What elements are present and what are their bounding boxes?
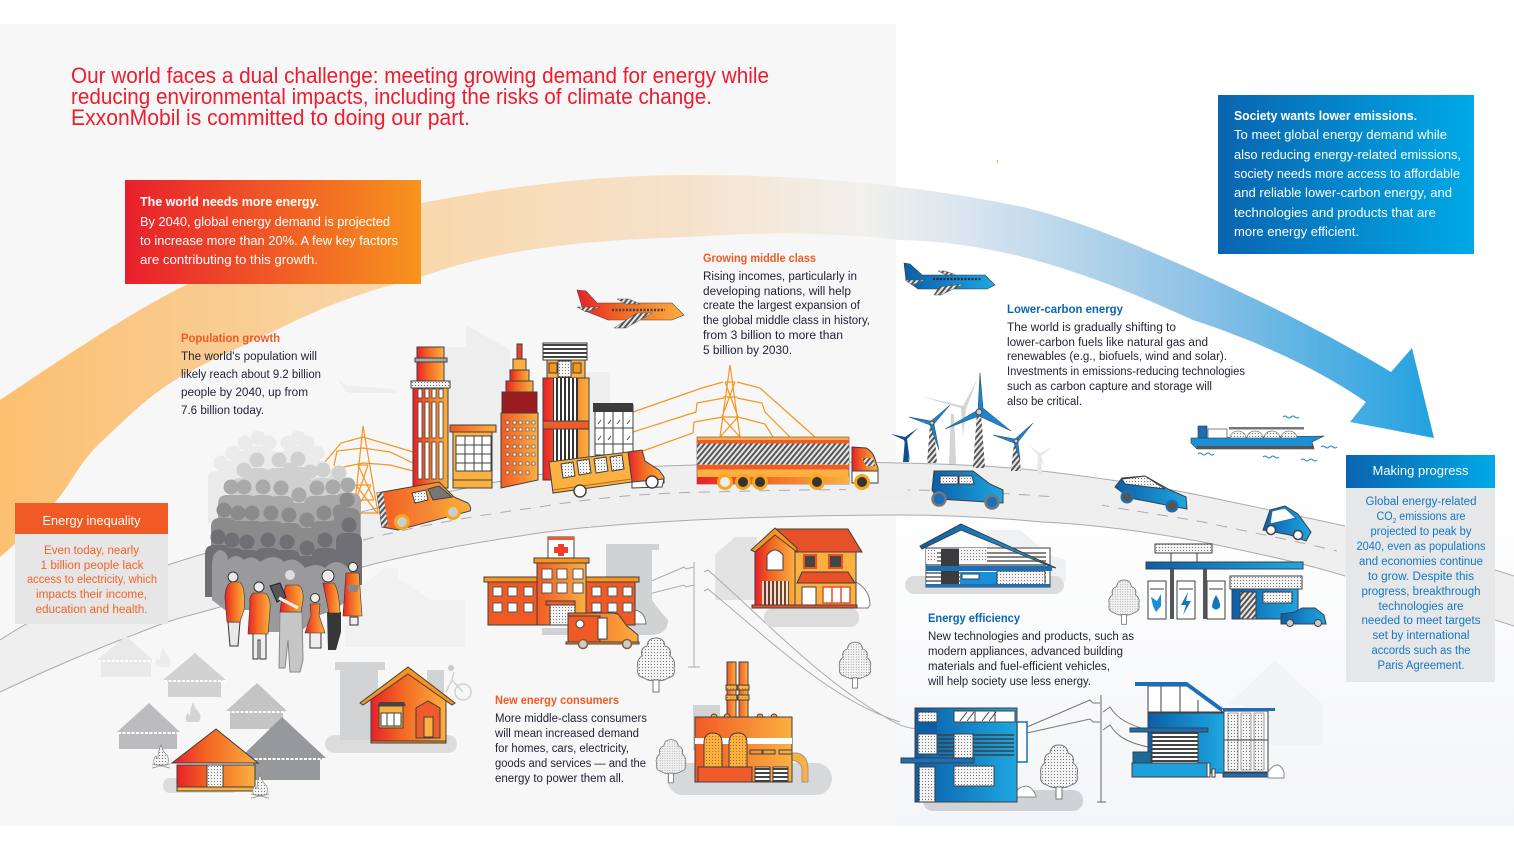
ambulance bbox=[566, 613, 639, 648]
blue building, lower right bbox=[1130, 682, 1284, 778]
callout: the world needs more energy: By 2040, global energy demand is projected bbox=[140, 214, 390, 229]
panel: making progress: technologies are bbox=[1378, 601, 1464, 613]
callout: the world needs more energy: The world needs more energy. bbox=[140, 194, 319, 209]
text: growing middle class: Rising incomes, particularly in bbox=[703, 271, 857, 283]
blue car bbox=[1115, 476, 1187, 512]
callout: society wants lower emissions bbox=[1218, 95, 1474, 254]
text: population growth: Population growth bbox=[181, 331, 280, 345]
building: stepped skyscraper bbox=[501, 344, 538, 488]
text: energy efficiency: will help society use less energy. bbox=[927, 676, 1091, 688]
huts bbox=[97, 636, 326, 798]
gas station bbox=[1146, 544, 1326, 626]
wind turbines bbox=[891, 373, 1053, 475]
crowd of people silhouettes bbox=[205, 430, 362, 632]
building: striped tower bbox=[543, 343, 589, 480]
heading bar: making progress bbox=[1346, 455, 1495, 488]
title: ExxonMobil is committed to doing our part. bbox=[71, 105, 470, 130]
text: growing middle class: 5 billion by 2030. bbox=[703, 345, 792, 357]
text: new energy consumers: New energy consumers bbox=[495, 693, 619, 707]
panel: making progress: accords such as the bbox=[1372, 645, 1470, 657]
power pole and wires, blue side bbox=[1027, 695, 1148, 802]
small blue car bbox=[1263, 506, 1311, 541]
blue turbines bbox=[891, 373, 1033, 471]
text: new energy consumers: will mean increased demand bbox=[494, 728, 639, 740]
text: population growth: people by 2040, up from bbox=[181, 387, 308, 399]
power lines and tower, centre bbox=[633, 365, 815, 452]
text: population growth bbox=[181, 331, 321, 417]
callout: society wants lower emissions: more energy efficient. bbox=[1234, 224, 1359, 239]
panel: making progress: Global energy-related bbox=[1366, 496, 1476, 508]
panel: making progress: to grow. Despite this bbox=[1368, 571, 1474, 583]
callout: society wants lower emissions: To meet global energy demand while bbox=[1234, 127, 1447, 142]
text: lower-carbon energy bbox=[1007, 302, 1245, 408]
title: Our world faces a dual challenge: meeting growing demand for energy while bbox=[71, 63, 769, 88]
blue house bbox=[905, 524, 1064, 594]
panel: making progress: CO bbox=[1376, 511, 1394, 523]
text: lower-carbon energy: Lower-carbon energy bbox=[1007, 302, 1123, 316]
building: tall red tower bbox=[411, 347, 450, 488]
text: population growth: The world's population will bbox=[181, 351, 317, 363]
panel: energy inequality: access to electricity, which bbox=[27, 574, 157, 586]
pale background silhouettes bbox=[337, 325, 1323, 745]
tree, bottom bbox=[1040, 745, 1078, 799]
text: lower-carbon energy: The world is gradually shifting to bbox=[1007, 322, 1176, 334]
text: growing middle class: create the largest expansion of bbox=[703, 300, 861, 312]
text: lower-carbon energy: Investments in emissions-reducing technologies bbox=[1007, 366, 1245, 378]
panel: energy inequality: Energy inequality bbox=[42, 513, 141, 528]
trees, orange side bbox=[638, 638, 871, 783]
panel: energy inequality: education and health. bbox=[36, 604, 148, 616]
heading bar: energy inequality bbox=[15, 503, 168, 534]
blue building, lower left bbox=[901, 708, 1083, 811]
panel: making progress: needed to meet targets bbox=[1362, 615, 1481, 627]
callout: the world needs more energy: are contributing to this growth. bbox=[140, 252, 318, 267]
panel: making progress: 2040, even as populations bbox=[1356, 541, 1486, 553]
callout: society wants lower emissions: technologies and products that are bbox=[1234, 205, 1436, 220]
text: population growth: likely reach about 9.2 billion bbox=[181, 369, 321, 381]
panel: making progress: Paris Agreement. bbox=[1378, 660, 1464, 672]
pale huts bbox=[97, 636, 326, 780]
blue plane bbox=[904, 263, 995, 295]
blue van bbox=[932, 471, 1003, 508]
person 1 bbox=[225, 572, 244, 646]
person 5 bbox=[322, 570, 341, 650]
panel: energy inequality bbox=[15, 503, 168, 624]
background panel bbox=[0, 24, 896, 826]
right background wash bbox=[896, 480, 1514, 826]
text: new energy consumers: for homes, cars, electricity, bbox=[495, 743, 629, 755]
fires bbox=[152, 647, 269, 798]
text: new energy consumers: goods and services — and the bbox=[495, 758, 646, 770]
text: energy efficiency: modern appliances, advanced building bbox=[928, 646, 1123, 658]
text: energy efficiency: New technologies and products, such as bbox=[928, 631, 1134, 643]
two-storey orange house bbox=[751, 528, 870, 627]
energy arrow band bbox=[0, 175, 1434, 557]
building: yellow grid block bbox=[450, 425, 496, 488]
callout: society wants lower emissions: Society wants lower emissions. bbox=[1234, 108, 1417, 123]
panel: making progress: and economies continue bbox=[1359, 556, 1483, 568]
foreground people bbox=[225, 562, 362, 672]
panel: making progress: emissions are bbox=[1396, 511, 1466, 523]
text: new energy consumers: More middle-class consumers bbox=[495, 713, 647, 725]
factory silhouette and shadow bbox=[542, 544, 832, 795]
yellow bus bbox=[549, 450, 664, 497]
title: reducing environmental impacts, including the risks of climate change. bbox=[71, 84, 712, 109]
text: lower-carbon energy: such as carbon capture and storage will bbox=[1007, 381, 1212, 393]
truck bbox=[697, 437, 878, 488]
car at station bbox=[1281, 608, 1326, 626]
text: population growth: 7.6 billion today. bbox=[181, 405, 264, 417]
ship bbox=[1191, 416, 1337, 461]
text: energy efficiency: materials and fuel-efficient vehicles, bbox=[928, 661, 1110, 673]
panel: making progress: set by international bbox=[1372, 630, 1470, 642]
text: growing middle class: developing nations, will help bbox=[703, 286, 851, 298]
grey turbines bbox=[920, 380, 1053, 475]
orange car bbox=[377, 482, 471, 530]
text: new energy consumers: energy to power them all. bbox=[495, 773, 624, 785]
callout: society wants lower emissions: and reliable lower-carbon energy, and bbox=[1234, 185, 1452, 200]
power lines and tower, left bbox=[325, 426, 413, 513]
panel: energy inequality: impacts their income, bbox=[36, 589, 147, 601]
text: energy efficiency: Energy efficiency bbox=[928, 611, 1020, 625]
title bbox=[71, 63, 769, 130]
text: growing middle class: Growing middle class bbox=[703, 251, 816, 265]
panel: making progress: projected to peak by bbox=[1370, 526, 1472, 538]
small speck bbox=[997, 160, 998, 163]
power pole and wires, centre bbox=[635, 562, 915, 728]
panel: making progress: progress, breakthrough bbox=[1362, 586, 1480, 598]
panel: making progress: 2 bbox=[1393, 518, 1396, 525]
text: new energy consumers bbox=[494, 693, 647, 785]
text: lower-carbon energy: also be critical. bbox=[1007, 396, 1082, 408]
panel: energy inequality: Even today, nearly bbox=[44, 545, 139, 557]
road bbox=[0, 462, 1514, 692]
text: lower-carbon energy: renewables (e.g., biofuels, wind and solar). bbox=[1007, 351, 1227, 363]
cyclist bbox=[446, 666, 471, 700]
text: lower-carbon energy: lower-carbon fuels like natural gas and bbox=[1007, 337, 1208, 349]
person 4 child bbox=[305, 594, 325, 648]
text: energy efficiency bbox=[927, 611, 1134, 688]
building: white glass block bbox=[593, 403, 633, 455]
pumps bbox=[1148, 581, 1225, 619]
text: growing middle class: from 3 billion to more than bbox=[703, 330, 843, 342]
buildings bbox=[411, 343, 633, 488]
person 6 bbox=[343, 562, 362, 625]
panel: making progress: Making progress bbox=[1372, 463, 1469, 478]
text: growing middle class: the global middle class in history, bbox=[703, 315, 870, 327]
callout: the world needs more energy bbox=[125, 180, 421, 284]
callout: the world needs more energy: to increase more than 20%. A few key factors bbox=[140, 233, 398, 248]
tree, blue side bbox=[1109, 580, 1139, 624]
person 2 bbox=[248, 582, 270, 659]
orange house bbox=[325, 662, 471, 753]
callout: society wants lower emissions: society needs more access to affordable bbox=[1234, 166, 1460, 181]
text: growing middle class bbox=[703, 251, 870, 357]
factory bbox=[695, 662, 808, 782]
callout: society wants lower emissions: also reducing energy-related emissions, bbox=[1234, 147, 1461, 162]
panel: energy inequality: 1 billion people lack bbox=[40, 560, 144, 572]
orange plane bbox=[577, 290, 684, 328]
panel: making progress bbox=[1346, 455, 1495, 682]
hospital bbox=[484, 537, 639, 625]
shadow under orange hut bbox=[163, 778, 238, 793]
orange hut bbox=[172, 729, 258, 791]
person 3 with tablet bbox=[270, 570, 303, 672]
